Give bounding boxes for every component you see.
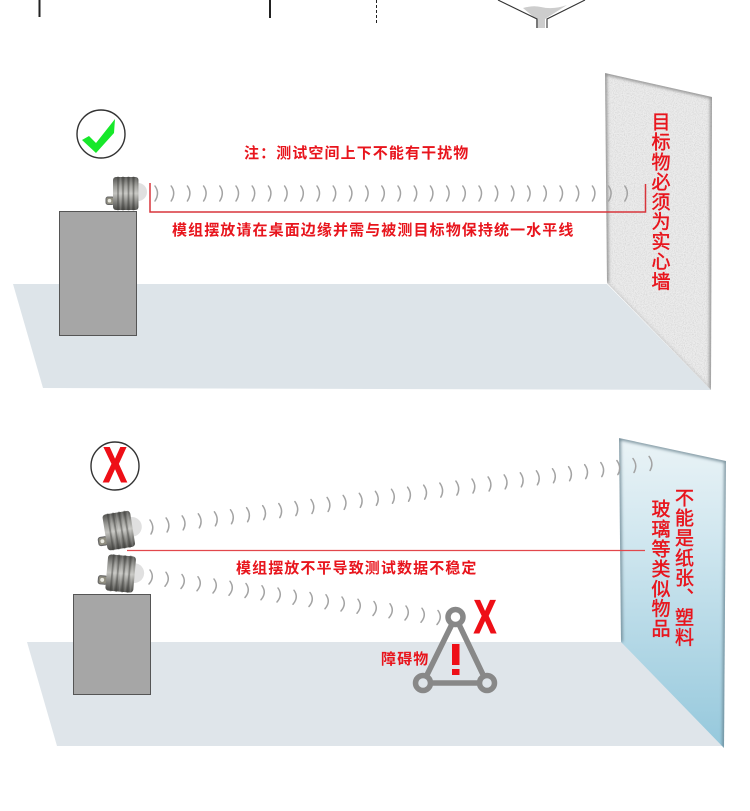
- panel: incorrect setup: [27, 438, 726, 748]
- desk: [60, 212, 136, 336]
- icon: red cross: [91, 438, 139, 493]
- floor: [13, 284, 711, 390]
- obstacle warning symbol: [416, 610, 494, 690]
- glass target wall: [619, 438, 726, 748]
- icon: red cross: X: [103, 438, 127, 493]
- placement instruction: 模组摆放请在桌面边缘并需与被测目标物保持统一水平线: [172, 221, 575, 239]
- signal waves: [155, 186, 627, 201]
- obstacle label: 障碍物: [381, 650, 429, 668]
- sensor tilted up: [94, 508, 145, 552]
- note: 注：测试空间上下不能有干扰物: [244, 144, 469, 162]
- sensor tilted down: [97, 553, 146, 594]
- floor: [27, 642, 724, 746]
- solid target wall: [605, 73, 712, 390]
- wall label: material warning: 不能是纸张、塑料: [672, 488, 694, 647]
- cropped diagram fragments at top: [40, 0, 585, 28]
- icon: green check: [77, 110, 125, 158]
- desk: [74, 594, 150, 694]
- obstacle cross mark: X: [474, 591, 496, 643]
- downward signal waves: [149, 570, 440, 624]
- panel: correct setup: [13, 73, 712, 390]
- sensor module: [106, 176, 147, 210]
- level reference line: [127, 550, 645, 552]
- wall label: 目标物必须为实心墙: [648, 112, 670, 291]
- wall label: similar items: 玻璃等类似物品: [648, 499, 670, 638]
- tilt warning: 模组摆放不平导致测试数据不稳定: [236, 559, 478, 577]
- upward signal waves: [150, 456, 652, 534]
- level bracket line: [150, 183, 646, 212]
